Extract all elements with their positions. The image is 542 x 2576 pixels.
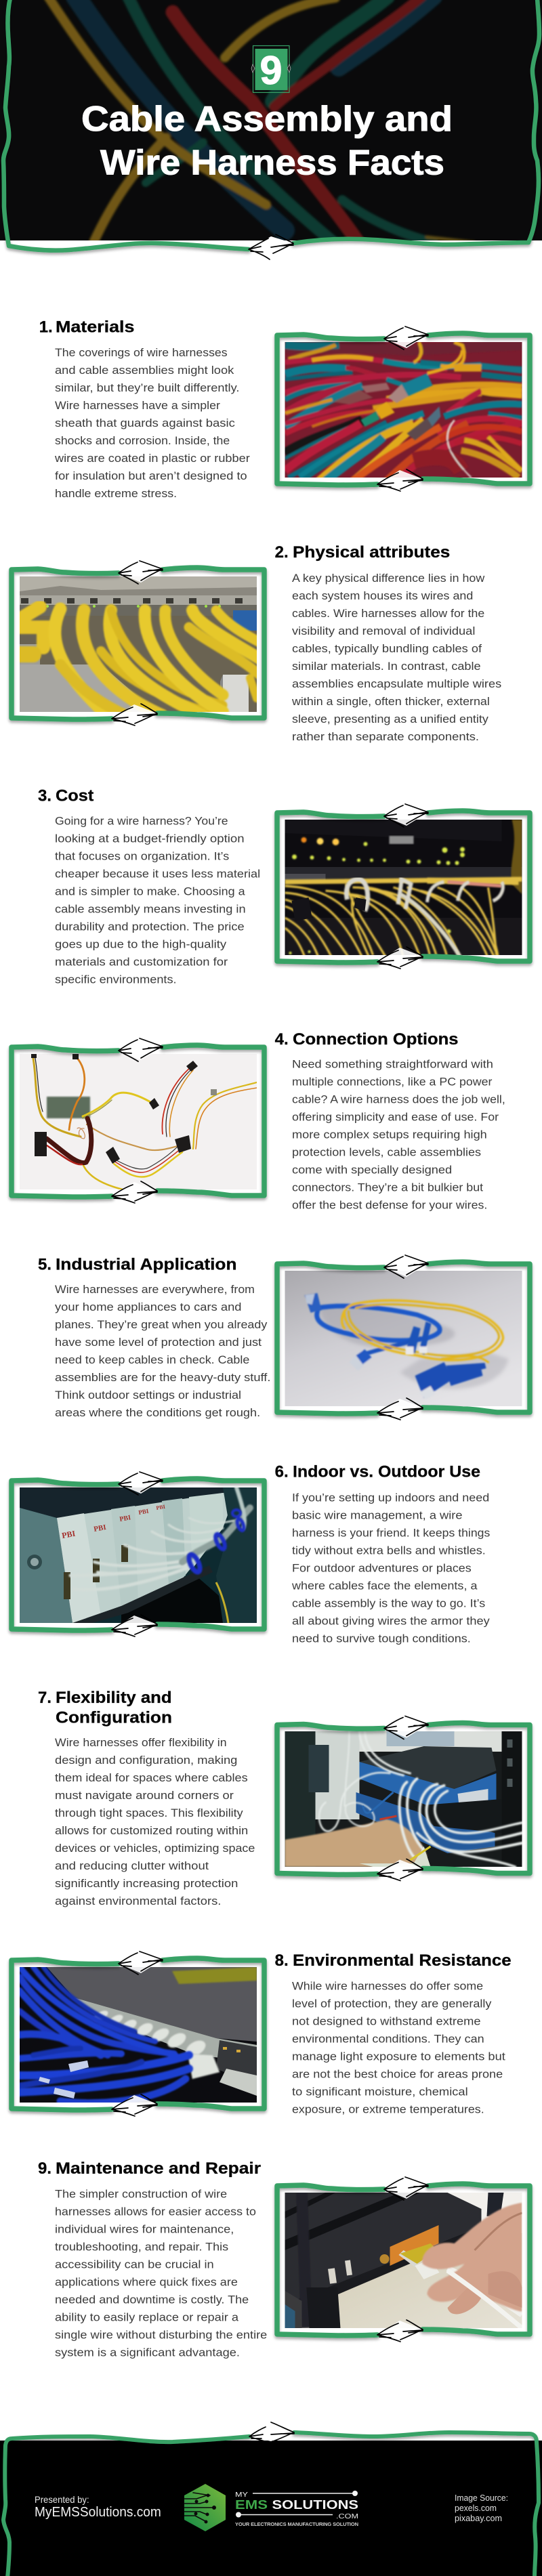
text block: assemblies encapsulate multiple wires <box>292 678 501 690</box>
text block: sheath that guards against basic <box>55 417 235 429</box>
text block: Wire harnesses offer flexibility in <box>55 1737 227 1749</box>
text block: sleeve, presenting as a unified entity <box>292 713 489 725</box>
text block: cable? A wire harness does the job well, <box>292 1094 505 1106</box>
presented by <box>35 2494 161 2520</box>
heading: 8. <box>275 1951 289 1970</box>
text block <box>54 347 250 500</box>
heading: Maintenance and Repair <box>56 2159 261 2178</box>
panel: 4 connection options <box>12 1030 505 1212</box>
text block <box>55 815 260 986</box>
text block: and cable assemblies might look <box>55 364 234 377</box>
presented by: MyEMSSolutions.com <box>35 2505 161 2520</box>
text block: within a single, often thicker, external <box>291 696 490 708</box>
text block: multiple connections, like a PC power <box>292 1076 493 1089</box>
text block: handle extreme stress. <box>55 488 177 500</box>
heading: Configuration <box>56 1708 172 1727</box>
text block: exposure, or extreme temperatures. <box>292 2104 484 2116</box>
text block: Wire harnesses are everywhere, from <box>55 1284 255 1296</box>
number badge: 9 <box>260 48 282 93</box>
panel: 9 maintenance and repair <box>38 2159 530 2359</box>
photo: server lights and yellow fibres <box>285 820 522 955</box>
panel: 1 materials <box>39 318 530 500</box>
text block: more complex setups requiring high <box>292 1129 487 1141</box>
text block: them ideal for spaces where cables <box>55 1772 248 1784</box>
knot <box>249 2422 294 2442</box>
text block: all about giving wires the armor they <box>292 1615 491 1627</box>
text block: cables. Wire harnesses allow for the <box>292 608 484 620</box>
text block: For outdoor adventures or places <box>292 1562 472 1574</box>
text block: harnesses allows for easier access to <box>55 2205 256 2218</box>
picture frame <box>277 326 530 491</box>
picture frame <box>12 1951 264 2116</box>
picture frame <box>12 561 264 725</box>
text block <box>292 1981 505 2116</box>
text block: are not the best choice for areas prone <box>292 2069 503 2081</box>
heading: 4. <box>275 1030 289 1049</box>
knot <box>249 234 293 259</box>
text block: connectors. They’re a bit bulkier but <box>292 1182 484 1194</box>
text block: allows for customized routing within <box>55 1825 248 1837</box>
heading: Indoor vs. Outdoor Use <box>293 1463 480 1481</box>
text block: troubleshooting, and repair. This <box>55 2241 228 2253</box>
heading <box>38 787 93 805</box>
text block: manage light exposure to elements but <box>292 2051 505 2063</box>
text block: needed and downtime is costly. The <box>55 2294 249 2306</box>
text block: not designed to withstand extreme <box>292 2016 481 2028</box>
heading <box>38 1689 172 1727</box>
text block: cable assembly is the way to go. It’s <box>292 1597 485 1609</box>
text block: The coverings of wire harnesses <box>55 347 228 359</box>
picture frame <box>12 1038 264 1203</box>
photo: server rack with white cables: PBI <box>138 1507 150 1516</box>
text block: need to survive tough conditions. <box>292 1632 471 1645</box>
logo <box>184 2484 358 2531</box>
panel: 5 industrial application <box>38 1255 530 1420</box>
text block: durability and protection. The price <box>55 921 245 933</box>
heading: 1. <box>39 318 53 336</box>
text block: Need something straightforward with <box>292 1059 493 1071</box>
text block: that focuses on organization. It’s <box>55 850 229 862</box>
text block: system is a significant advantage. <box>55 2346 240 2359</box>
photo: server rack with white cables: PBI <box>61 1529 77 1540</box>
text block: need to keep cables in check. Cable <box>55 1354 249 1366</box>
panel: 3 cost <box>38 787 530 986</box>
text block: areas where the conditions get rough. <box>55 1407 260 1419</box>
panel: 2 physical attributes <box>12 543 501 743</box>
title <box>81 100 453 183</box>
text block: to significant moisture, chemical <box>292 2086 468 2098</box>
text block: accessibility can be crucial in <box>55 2258 214 2271</box>
heading: Flexibility and <box>56 1689 172 1707</box>
footer panel <box>0 2422 542 2576</box>
text block <box>291 1492 491 1645</box>
heading: 7. <box>38 1689 51 1707</box>
text block <box>55 1737 255 1907</box>
text block: environmental conditions. They can <box>292 2033 484 2046</box>
logo: MY <box>235 2491 248 2499</box>
text block <box>291 572 501 743</box>
text block: rather than separate components. <box>292 731 479 743</box>
footer frame <box>3 2422 539 2576</box>
text block: your home appliances to cars and <box>55 1301 241 1313</box>
photo: twisted coloured wires <box>285 342 522 478</box>
heading: 2. <box>275 543 289 562</box>
text block: materials and customization for <box>55 956 228 968</box>
text block: have some level of protection and just <box>55 1336 262 1349</box>
text block: basic wire management, a wire <box>292 1509 462 1521</box>
image sources: pexels.com <box>455 2504 497 2513</box>
text block: offering simplicity and ease of use. For <box>292 1112 499 1124</box>
header background wires <box>43 0 476 240</box>
image sources <box>455 2493 508 2523</box>
text block: If you’re setting up indoors and need <box>292 1492 489 1504</box>
text block: shocks and corrosion. Inside, the <box>55 435 230 447</box>
photo: hand plugging cable into router <box>285 2193 522 2328</box>
heading: 6. <box>275 1463 289 1481</box>
text block: ability to easily replace or repair a <box>55 2311 239 2323</box>
header panel <box>0 0 542 259</box>
photo: blue ethernet cables <box>20 1967 257 2103</box>
text block: for insulation but aren’t designed to <box>55 470 247 482</box>
text block: cheaper because it uses less material <box>55 868 260 880</box>
photo: loose wiring harness <box>20 1054 257 1189</box>
text block: goes up due to the high-quality <box>55 938 227 950</box>
text block: each system houses its wires and <box>292 590 473 602</box>
picture frame <box>12 1472 264 1637</box>
header frame <box>3 0 539 259</box>
text block: come with specially designed <box>292 1164 452 1177</box>
text block: Going for a wire harness? You’re <box>55 815 228 827</box>
panel: 7 flexibility and configuration <box>38 1689 530 1907</box>
photo: hand wiring rack <box>285 1731 522 1867</box>
text block: single wire without disturbing the entire <box>55 2329 267 2341</box>
text block: cable assembly means investing in <box>55 903 246 915</box>
heading: 5. <box>38 1256 51 1273</box>
text block: must navigate around corners or <box>55 1790 234 1802</box>
title: Wire Harness Facts <box>100 144 444 183</box>
panel: 6 indoor vs outdoor <box>12 1463 491 1645</box>
logo: .COM <box>336 2512 358 2520</box>
text block <box>292 1059 505 1212</box>
text block: wires are coated in plastic or rubber <box>54 452 250 465</box>
text block: offer the best defense for your wires. <box>292 1200 487 1212</box>
image sources: pixabay.com <box>455 2514 502 2523</box>
text block: planes. They’re great when you already <box>55 1319 268 1331</box>
photo: server rack with white cables <box>20 1487 257 1623</box>
image sources: Image Source: <box>455 2493 508 2503</box>
text block: protection levels, cable assemblies <box>292 1147 481 1159</box>
text block: specific environments. <box>55 973 177 986</box>
text block: through tight spaces. This flexibility <box>55 1807 243 1819</box>
heading: Environmental Resistance <box>293 1951 512 1970</box>
logo: EMS <box>235 2498 268 2512</box>
text block: Wire harnesses have a simpler <box>55 400 220 412</box>
text block: significantly increasing protection <box>55 1878 238 1890</box>
text block: against environmental factors. <box>55 1895 221 1907</box>
text block: individual wires for maintenance, <box>55 2223 234 2235</box>
text block: harness is your friend. It keeps things <box>292 1527 490 1539</box>
text block: and is simpler to make. Choosing a <box>55 885 245 898</box>
picture frame <box>277 1255 530 1420</box>
photo: yellow patch cables <box>20 576 257 712</box>
heading: Materials <box>56 318 134 336</box>
text block: While wire harnesses do offer some <box>292 1981 483 1993</box>
icon: circuit hexagon <box>184 2484 226 2531</box>
picture frame <box>277 1716 530 1880</box>
text block: cables, typically bundling cables of <box>292 643 482 655</box>
text block: assemblies are for the heavy-duty stuff. <box>55 1372 270 1384</box>
text block: similar, but they’re built differently. <box>55 382 239 394</box>
picture frame <box>277 804 530 969</box>
text block <box>55 1284 270 1419</box>
text block: A key physical difference lies in how <box>292 572 484 585</box>
title: Cable Assembly and <box>81 100 453 139</box>
text block: level of protection, they are generally <box>292 1998 492 2010</box>
text block: similar materials. In contrast, cable <box>292 660 481 673</box>
heading: Cost <box>56 787 93 805</box>
heading: Industrial Application <box>56 1256 237 1273</box>
text block: and reducing clutter without <box>55 1860 209 1872</box>
text block: Think outdoor settings or industrial <box>55 1389 241 1401</box>
text block: applications where quick fixes are <box>55 2276 238 2288</box>
panel: 8 environmental resistance <box>12 1951 512 2116</box>
picture frame <box>277 2177 530 2342</box>
photo: blue and yellow patch cords <box>285 1271 522 1406</box>
logo: SOLUTIONS <box>272 2498 358 2512</box>
text block: design and configuration, making <box>55 1754 237 1767</box>
heading: Physical attributes <box>293 543 450 562</box>
photo: server rack with white cables: PBI <box>156 1504 165 1511</box>
heading: Connection Options <box>293 1030 458 1049</box>
text block: tidy without extra bells and whistles. <box>292 1544 486 1557</box>
text block: The simpler construction of wire <box>55 2188 227 2200</box>
text block <box>55 2188 267 2359</box>
text block: looking at a budget-friendly option <box>55 832 245 845</box>
text block: where cables face the elements, a <box>291 1580 478 1592</box>
heading: 3. <box>38 787 51 805</box>
photo: server rack with white cables: PBI <box>93 1523 107 1534</box>
logo: YOUR ELECTRONICS MANUFACTURING SOLUTION <box>235 2521 358 2527</box>
text block: devices or vehicles, optimizing space <box>55 1842 255 1855</box>
presented by: Presented by: <box>35 2494 89 2505</box>
heading: 9. <box>38 2159 51 2178</box>
photo: server rack with white cables: PBI <box>119 1514 131 1523</box>
number badge <box>251 46 291 93</box>
text block: visibility and removal of individual <box>292 625 475 637</box>
